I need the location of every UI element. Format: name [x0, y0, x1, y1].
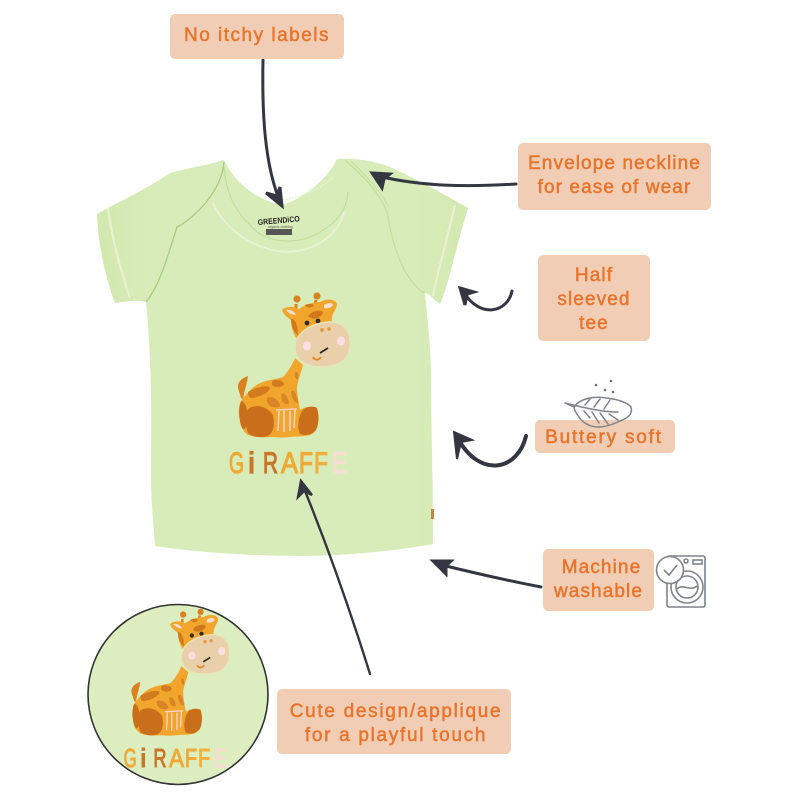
callout: no itchy labels: No itchy labels [184, 24, 330, 46]
callout: cute design: Cute design/applique [290, 700, 502, 722]
zoomed detail circle [88, 604, 268, 784]
callout: half sleeved tee [538, 255, 650, 341]
neck label: GREENDiCO [257, 214, 300, 227]
callout: envelope neckline: for ease of wear [538, 176, 691, 198]
arrow: envelope neckline [372, 173, 516, 188]
illustration layer [87, 59, 706, 786]
callout: buttery soft: Buttery soft [545, 426, 663, 448]
callout: half sleeved tee: sleeved [557, 289, 631, 310]
callout: half sleeved tee: Half [575, 265, 613, 286]
callout: machine washable: Machine [562, 557, 641, 578]
side tag [431, 509, 434, 519]
arrow: buttery soft [454, 432, 526, 466]
callout: envelope neckline: Envelope neckline [528, 152, 701, 174]
neck label [257, 214, 300, 235]
neck label: organic clothing [268, 225, 293, 229]
callout: envelope neckline [518, 143, 711, 210]
arrow: no itchy labels [263, 60, 282, 206]
callout: machine washable: washable [554, 581, 643, 602]
callout: buttery soft [535, 420, 675, 453]
giraffe applique [229, 292, 350, 480]
icon: washing machine [656, 556, 705, 607]
callout: cute design [277, 689, 511, 754]
arrow: machine washable [433, 561, 541, 587]
callout: no itchy labels [170, 14, 344, 59]
callout: half sleeved tee: tee [579, 313, 609, 334]
arrow: half sleeved [460, 288, 512, 310]
callout: machine washable [543, 549, 654, 611]
t-shirt [97, 159, 468, 556]
arrow: cute design [298, 481, 370, 674]
callout: cute design: for a playful touch [305, 724, 487, 746]
